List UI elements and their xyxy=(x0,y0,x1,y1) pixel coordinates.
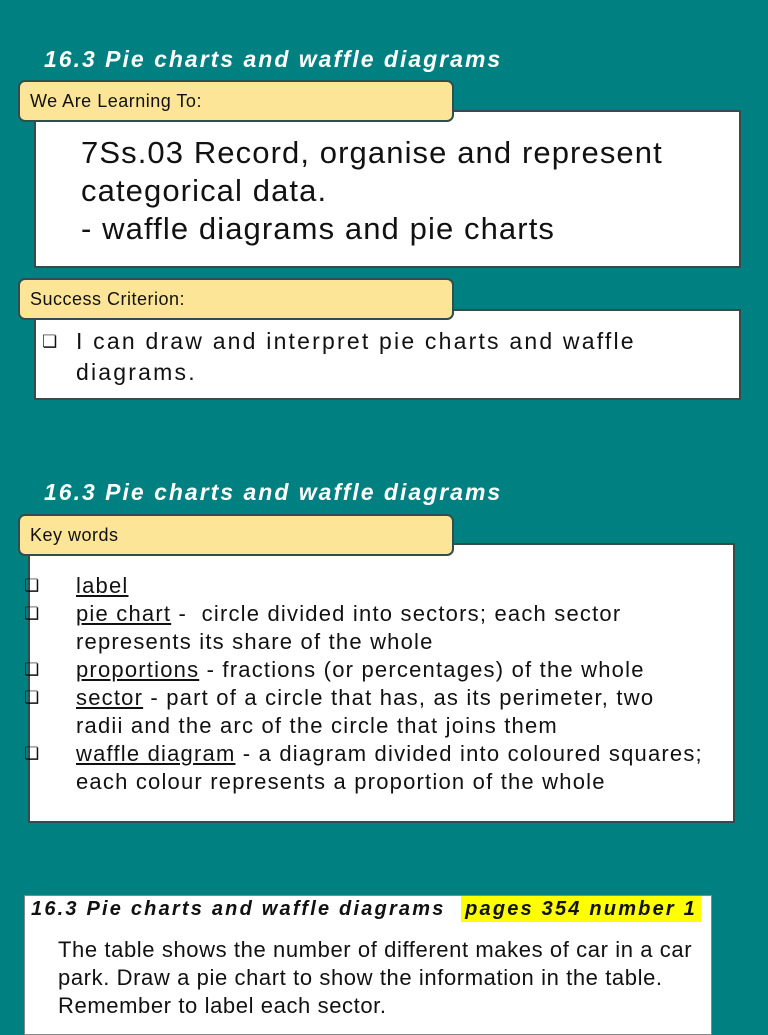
panel: success criterion: diagrams. xyxy=(76,359,197,385)
panel: key words: sector - part of a circle that has, as its perimeter, two xyxy=(76,685,654,710)
panel: key words: label xyxy=(76,573,128,598)
tab: key words xyxy=(18,514,454,556)
panel: key words: each colour represents a proportion of the whole xyxy=(76,769,606,794)
panel: learning objective: - waffle diagrams and pie charts xyxy=(81,211,555,246)
panel: key words xyxy=(28,543,735,823)
panel: exercise xyxy=(24,895,712,1035)
exercise text: Remember to label each sector. xyxy=(58,993,387,1018)
tab: success criterion xyxy=(18,278,454,320)
tab: success criterion: Success Criterion: xyxy=(30,289,185,309)
title 2: 16.3 Pie charts and waffle diagrams xyxy=(44,479,502,505)
panel: key words: represents its share of the whole xyxy=(76,629,434,654)
panel: key words: proportions - fractions (or percentages) of the whole xyxy=(76,657,645,682)
exercise heading: 16.3 Pie charts and waffle diagrams pages 354 number 1 xyxy=(31,898,697,920)
tab: key words: Key words xyxy=(30,525,119,545)
panel: key words: pie chart - circle divided into sectors; each sector xyxy=(76,601,621,626)
panel: success criterion: I can draw and interpret pie charts and waffle xyxy=(76,328,636,354)
tab: we are learning to xyxy=(18,80,454,122)
panel: key words: radii and the arc of the circle that joins them xyxy=(76,713,558,738)
title 1: 16.3 Pie charts and waffle diagrams xyxy=(44,46,502,72)
panel: learning objective xyxy=(34,110,741,268)
panel: key words: waffle diagram - a diagram divided into coloured squares; xyxy=(76,741,703,766)
panel: learning objective: 7Ss.03 Record, organise and represent xyxy=(81,135,663,170)
tab: we are learning to: We Are Learning To: xyxy=(30,91,202,111)
panel: learning objective: categorical data. xyxy=(81,173,327,208)
panel: success criterion xyxy=(34,309,741,400)
exercise text: park. Draw a pie chart to show the information in the table. xyxy=(58,965,663,990)
exercise text xyxy=(58,937,692,1018)
exercise text: The table shows the number of different makes of car in a car xyxy=(58,937,692,962)
